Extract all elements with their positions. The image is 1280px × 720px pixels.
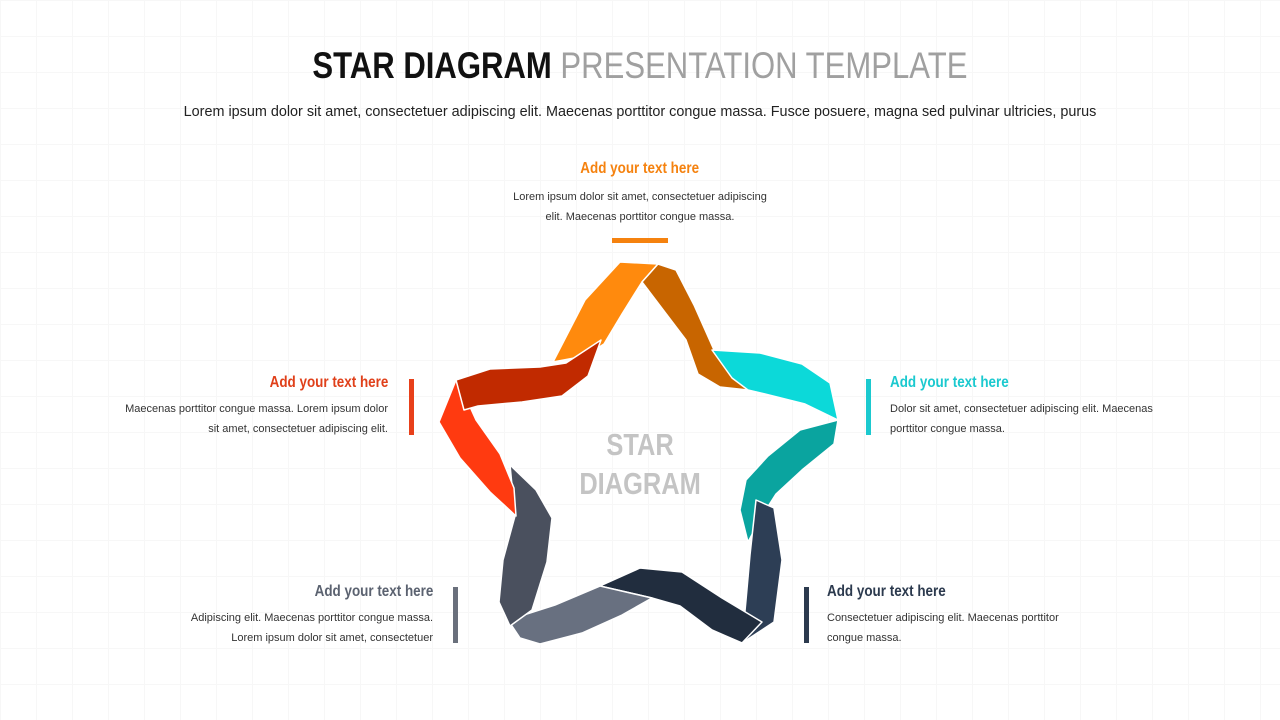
title: STAR DIAGRAM PRESENTATION TEMPLATE — [312, 45, 968, 86]
text block: top: Add your text here — [581, 160, 699, 177]
center label — [579, 427, 701, 501]
text block: left: sit amet, consectetuer adipiscing elit. — [208, 423, 388, 435]
text block: bottom left: Lorem ipsum dolor sit amet, consectetuer — [231, 632, 433, 644]
text block: top: Lorem ipsum dolor sit amet, consectetuer adipiscing — [513, 191, 767, 203]
accent bar: left — [409, 379, 414, 435]
accent bar: bottom right — [804, 587, 809, 643]
text block: left — [125, 374, 388, 435]
text block: bottom right: Consectetuer adipiscing elit. Maecenas porttitor — [827, 612, 1059, 624]
accent bar: top — [612, 238, 668, 243]
center label: DIAGRAM — [579, 466, 701, 501]
text block: right — [890, 374, 1153, 435]
text block: left: Maecenas porttitor congue massa. Lorem ipsum dolor — [125, 403, 388, 415]
center label: STAR — [606, 427, 674, 462]
text block: top — [513, 160, 767, 223]
text block: bottom right — [827, 583, 1059, 644]
text block: top: elit. Maecenas porttitor congue massa. — [546, 211, 734, 223]
text block: bottom left — [191, 583, 433, 644]
text block: right: porttitor congue massa. — [890, 423, 1005, 435]
text block: left: Add your text here — [269, 374, 388, 391]
text block: bottom right: Add your text here — [827, 583, 946, 600]
text block: right: Dolor sit amet, consectetuer adipiscing elit. Maecenas — [890, 403, 1153, 415]
text block: bottom right: congue massa. — [827, 632, 902, 644]
text block: bottom left: Adipiscing elit. Maecenas porttitor congue massa. — [191, 612, 433, 624]
text block: right: Add your text here — [890, 374, 1009, 391]
accent bar: right — [866, 379, 871, 435]
text block: bottom left: Add your text here — [314, 583, 433, 600]
subtitle: Lorem ipsum dolor sit amet, consectetuer adipiscing elit. Maecenas porttitor congue massa. Fusce posuere, magna sed pulvinar ultricies, purus — [184, 104, 1096, 120]
accent bar: bottom left — [453, 587, 458, 643]
